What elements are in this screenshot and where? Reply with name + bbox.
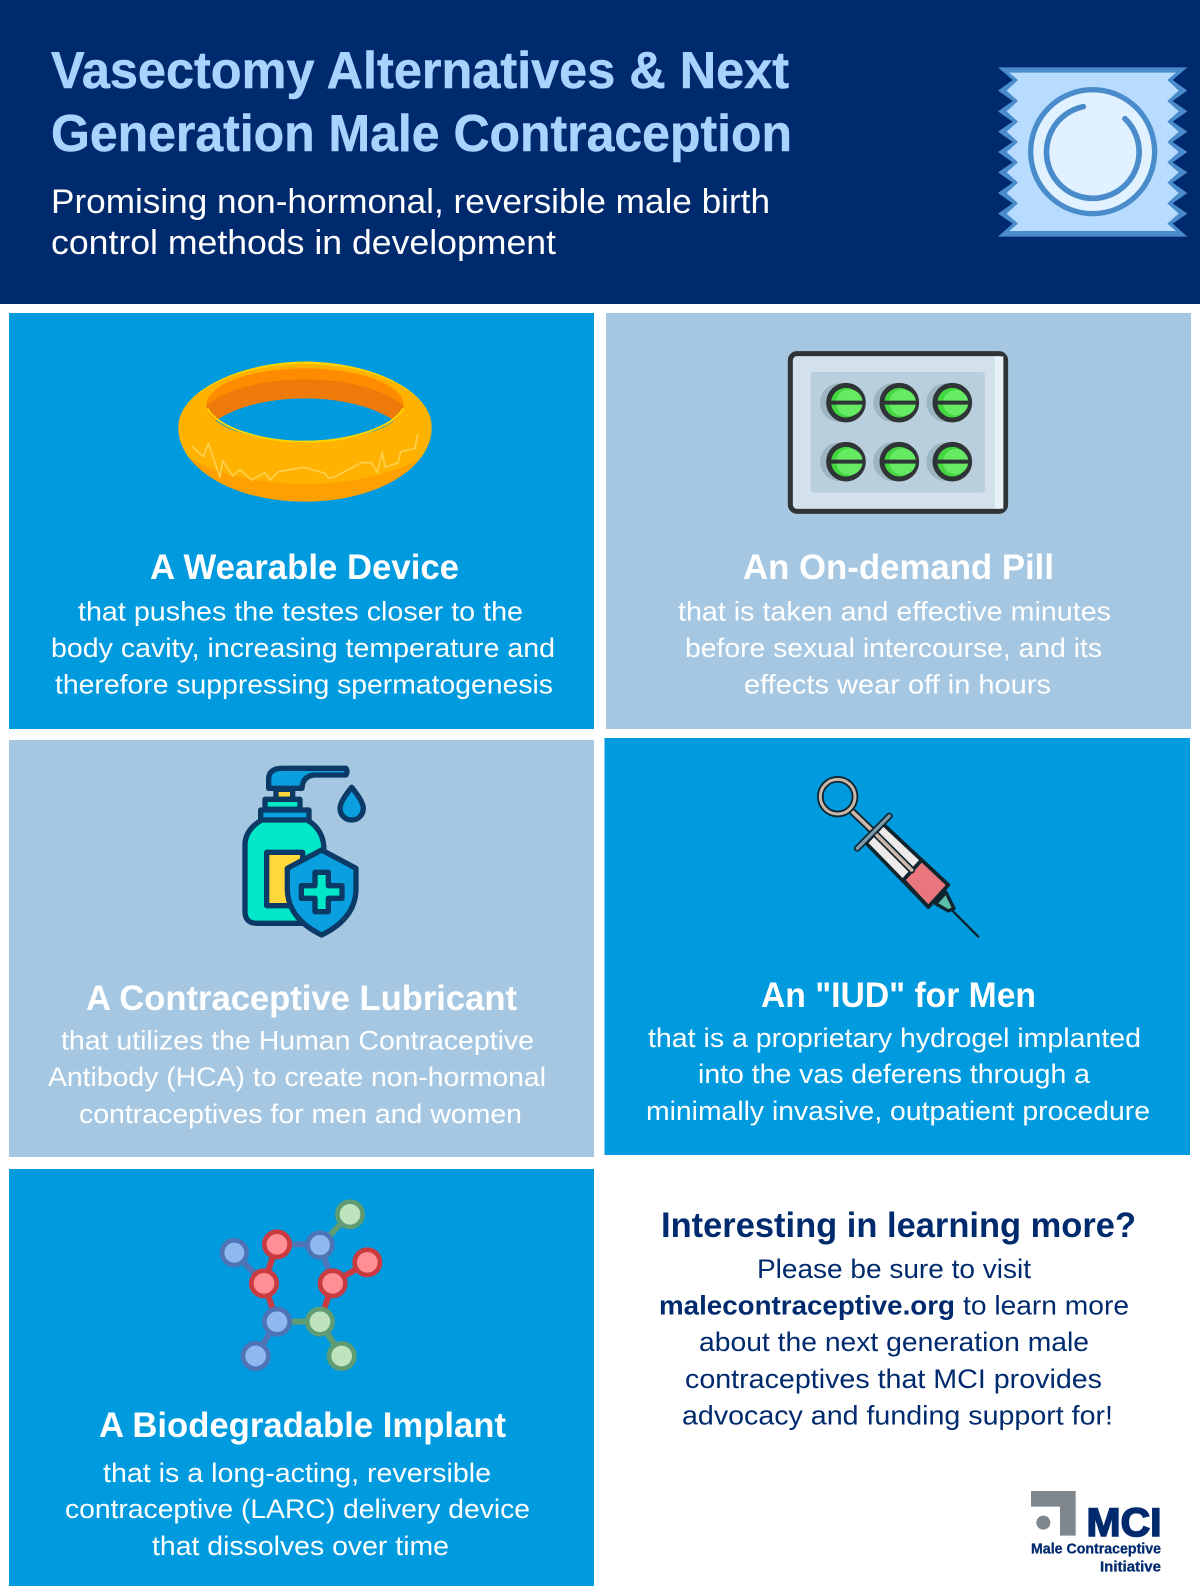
call to action text: to learn more — [963, 1290, 1129, 1320]
call to action text: advocacy and funding support for! — [682, 1400, 1113, 1430]
description: into the vas deferens through a — [698, 1059, 1091, 1089]
description — [646, 1023, 1150, 1126]
description — [65, 1458, 530, 1561]
panel: IUD for men — [604, 738, 1190, 1155]
title: Generation Male Contraception — [51, 105, 792, 163]
description: that dissolves over time — [152, 1531, 449, 1561]
description: that is a long-acting, reversible — [103, 1458, 491, 1488]
call to action text: about the next generation male — [699, 1327, 1089, 1357]
description — [678, 596, 1111, 700]
description: contraceptive (LARC) delivery device — [65, 1494, 530, 1524]
description: that is a proprietary hydrogel implanted — [648, 1023, 1141, 1053]
description — [51, 596, 555, 700]
logo wordmark: Initiative — [1100, 1558, 1161, 1576]
heading: Interesting in learning more? — [661, 1206, 1136, 1245]
icon: blister pack — [790, 354, 1006, 511]
description: that pushes the testes closer to the — [78, 596, 523, 626]
description: therefore suppressing spermatogenesis — [55, 670, 553, 700]
icon: molecule — [222, 1202, 380, 1369]
panel: biodegradable implant — [9, 1169, 594, 1586]
panel: on-demand pill — [606, 313, 1191, 729]
header banner — [0, 0, 1200, 304]
logo wordmark: Male Contraceptive — [1031, 1540, 1161, 1558]
icon: syringe — [820, 779, 978, 937]
call to action text: contraceptives that MCI provides — [685, 1364, 1102, 1394]
heading: An On-demand Pill — [743, 548, 1054, 587]
logo wordmark: MCI — [1086, 1501, 1162, 1545]
description: effects wear off in hours — [744, 670, 1051, 700]
description: body cavity, increasing temperature and — [51, 633, 555, 663]
description: minimally invasive, outpatient procedure — [646, 1096, 1150, 1126]
panel: wearable device — [9, 313, 594, 729]
description: that utilizes the Human Contraceptive — [61, 1026, 534, 1056]
heading: A Contraceptive Lubricant — [86, 979, 517, 1018]
title: Vasectomy Alternatives & Next — [51, 42, 789, 100]
call to action text: malecontraceptive.org — [659, 1290, 955, 1320]
icon: ring — [165, 362, 445, 502]
call to action text: Please be sure to visit — [757, 1254, 1032, 1284]
call to action text — [659, 1254, 1129, 1430]
logo wordmark — [1031, 1501, 1162, 1576]
call to action — [659, 1206, 1136, 1430]
icon: bottle and shield — [245, 768, 363, 935]
panel: contraceptive lubricant — [9, 740, 594, 1157]
description: Antibody (HCA) to create non-hormonal — [48, 1062, 546, 1092]
heading: An "IUD" for Men — [761, 976, 1036, 1015]
MCI logo — [1031, 1491, 1162, 1576]
icon: condom packet — [998, 67, 1187, 237]
subtitle: Promising non-hormonal, reversible male birth — [51, 183, 770, 221]
title — [51, 42, 792, 163]
heading: A Wearable Device — [150, 548, 459, 587]
description: contraceptives for men and women — [79, 1099, 522, 1129]
logo mark — [1031, 1491, 1076, 1536]
subtitle: control methods in development — [51, 224, 557, 262]
description: that is taken and effective minutes — [678, 596, 1111, 626]
heading: A Biodegradable Implant — [99, 1406, 506, 1445]
description — [48, 1026, 546, 1129]
subtitle — [51, 183, 770, 262]
description: before sexual intercourse, and its — [685, 633, 1102, 663]
